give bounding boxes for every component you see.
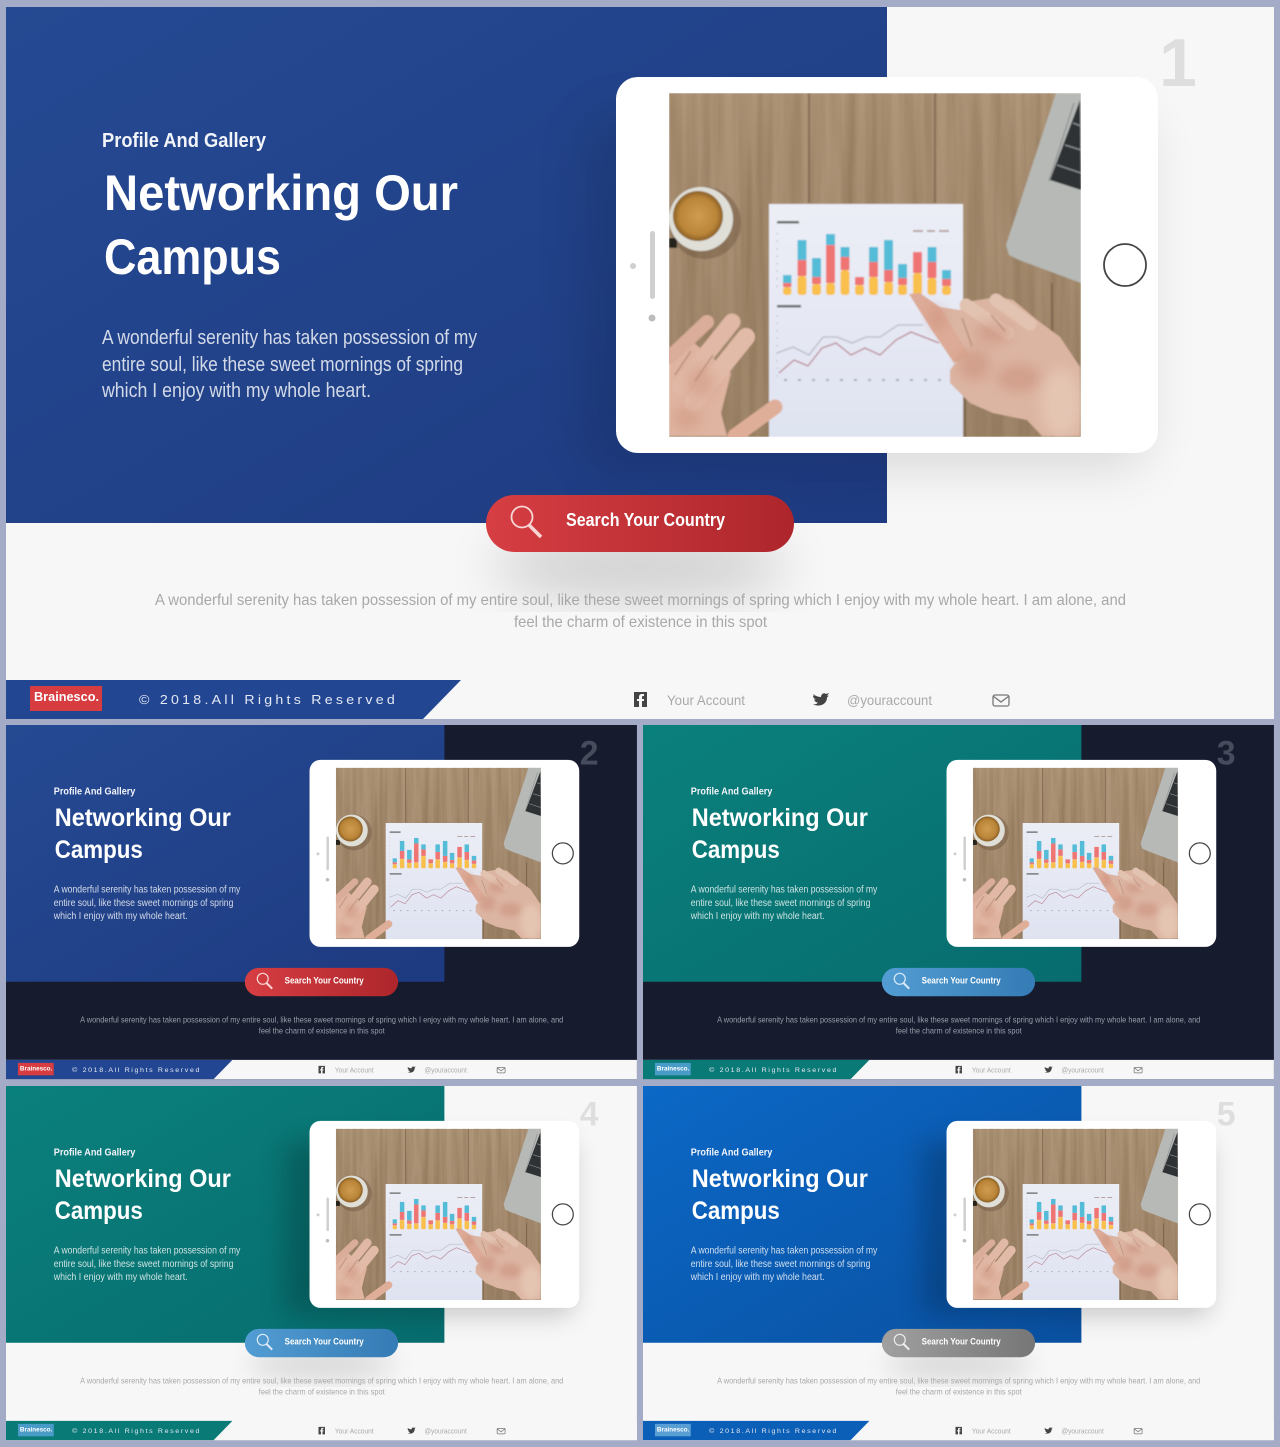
tablet mockup	[947, 760, 1216, 947]
icon: mail	[497, 1428, 505, 1434]
logo: Brainesco.	[657, 1065, 689, 1072]
panel: colour block	[6, 1086, 444, 1343]
caption: A wonderful serenity has taken possession of my entire soul, like these sweet mornings of spring which I enjoy with my whole heart. I am alone, and	[80, 1016, 563, 1025]
account label: Your Account	[972, 1428, 1011, 1435]
icon: facebook	[955, 1427, 962, 1434]
account label: Your Account	[667, 692, 745, 708]
panel: colour block	[643, 1086, 1081, 1343]
search button: Search Your Country	[285, 1336, 364, 1346]
description	[101, 327, 477, 402]
heading block: Profile And Gallery	[691, 787, 773, 798]
description: which I enjoy with my whole heart.	[101, 380, 371, 402]
tablet mockup	[616, 77, 1158, 453]
icon: twitter	[813, 693, 829, 706]
slide number: 3	[1217, 734, 1236, 772]
slide number: 1	[1159, 25, 1197, 101]
slide number: 4	[580, 1095, 599, 1133]
icon: mail	[1134, 1067, 1142, 1073]
copyright: © 2018.All Rights Reserved	[72, 1427, 201, 1435]
logo	[30, 686, 102, 711]
icon: mail	[993, 695, 1009, 706]
panel: colour block	[6, 725, 444, 982]
tablet mockup	[310, 1121, 579, 1308]
description: which I enjoy with my whole heart.	[690, 1272, 825, 1283]
heading block: Networking Our	[104, 165, 458, 221]
handle label: @youraccount	[847, 692, 932, 708]
description: entire soul, like these sweet mornings of spring	[102, 354, 463, 376]
description: A wonderful serenity has taken possession of my	[54, 885, 240, 896]
handle label: @youraccount	[1061, 1067, 1104, 1074]
footer	[643, 1421, 1274, 1440]
photo: desk with charts	[669, 93, 1081, 437]
caption: feel the charm of existence in this spot	[259, 1027, 385, 1036]
description: A wonderful serenity has taken possession of my	[102, 327, 477, 349]
slide number: 2	[580, 734, 599, 772]
heading block: Profile And Gallery	[54, 787, 136, 798]
heading block: Campus	[692, 836, 780, 864]
description	[53, 1246, 240, 1283]
copyright: © 2018.All Rights Reserved	[709, 1427, 838, 1435]
footer	[6, 680, 1010, 719]
footer	[6, 1421, 637, 1440]
description: A wonderful serenity has taken possession of my	[691, 885, 877, 896]
button shadow	[490, 539, 790, 595]
heading block: Profile And Gallery	[54, 1148, 136, 1159]
logo: Brainesco.	[34, 689, 99, 704]
button shadow	[884, 1351, 1033, 1379]
search button	[245, 1329, 398, 1357]
logo: Brainesco.	[20, 1065, 52, 1072]
search button	[882, 968, 1035, 996]
caption: A wonderful serenity has taken possession of my entire soul, like these sweet mornings of spring which I enjoy with my whole heart. I am alone, and	[717, 1016, 1200, 1025]
panel: colour block	[643, 725, 1081, 982]
description	[690, 1246, 877, 1283]
account label: Your Account	[335, 1428, 374, 1435]
heading block: Profile And Gallery	[691, 1148, 773, 1159]
search button	[882, 1329, 1035, 1357]
description: which I enjoy with my whole heart.	[53, 1272, 188, 1283]
heading block: Campus	[55, 1197, 143, 1225]
icon: twitter	[1045, 1427, 1053, 1434]
heading block: Campus	[104, 229, 281, 285]
photo: desk with charts	[973, 1129, 1178, 1300]
slide 1: large blue light	[6, 7, 1274, 719]
description: entire soul, like these sweet mornings of spring	[54, 1259, 233, 1270]
heading block: Networking Our	[692, 804, 868, 832]
tablet shadow	[922, 1141, 1210, 1315]
logo	[18, 1424, 54, 1436]
heading block	[691, 787, 868, 864]
tablet shadow	[285, 1141, 573, 1315]
description: entire soul, like these sweet mornings of spring	[54, 898, 233, 909]
handle label: @youraccount	[1061, 1428, 1104, 1435]
caption: A wonderful serenity has taken possession of my entire soul, like these sweet mornings of spring which I enjoy with my whole heart. I am alone, and	[80, 1377, 563, 1386]
tablet shadow	[586, 117, 1146, 467]
icon: mail	[497, 1067, 505, 1073]
caption: A wonderful serenity has taken possession of my entire soul, like these sweet mornings of spring which I enjoy with my whole heart. I am alone, and	[717, 1377, 1200, 1386]
icon: facebook	[318, 1427, 325, 1434]
photo: desk with charts	[973, 768, 1178, 939]
account label: Your Account	[335, 1067, 374, 1074]
tablet mockup	[310, 760, 579, 947]
heading block: Profile And Gallery	[102, 130, 267, 152]
account label: Your Account	[972, 1067, 1011, 1074]
icon: facebook	[955, 1066, 962, 1073]
icon: twitter	[1045, 1066, 1053, 1073]
heading block: Networking Our	[692, 1165, 868, 1193]
caption	[717, 1377, 1200, 1397]
description	[53, 885, 240, 922]
description: entire soul, like these sweet mornings of spring	[691, 898, 870, 909]
slide 4: teal light	[6, 1086, 637, 1440]
icon: facebook	[634, 692, 647, 707]
heading block: Networking Our	[55, 804, 231, 832]
caption: feel the charm of existence in this spot	[896, 1388, 1022, 1397]
heading block: Networking Our	[55, 1165, 231, 1193]
search button	[245, 968, 398, 996]
description	[690, 885, 877, 922]
photo: desk with charts	[336, 768, 541, 939]
caption	[80, 1016, 563, 1036]
logo: Brainesco.	[20, 1426, 52, 1433]
caption: A wonderful serenity has taken possession of my entire soul, like these sweet mornings of spring which I enjoy with my whole heart. I am alone, and	[155, 592, 1126, 609]
tablet mockup	[947, 1121, 1216, 1308]
slide 2: blue dark	[6, 725, 637, 1079]
logo	[655, 1063, 691, 1075]
caption	[155, 592, 1126, 631]
icon: facebook	[318, 1066, 325, 1073]
panel: colour block	[6, 7, 887, 523]
heading block	[691, 1148, 868, 1225]
description: entire soul, like these sweet mornings of spring	[691, 1259, 870, 1270]
description: A wonderful serenity has taken possession of my	[691, 1246, 877, 1257]
logo	[18, 1063, 54, 1075]
copyright: © 2018.All Rights Reserved	[139, 692, 398, 707]
slide number: 5	[1217, 1095, 1236, 1133]
heading block: Campus	[55, 836, 143, 864]
caption	[717, 1016, 1200, 1036]
logo: Brainesco.	[657, 1426, 689, 1433]
heading block: Campus	[692, 1197, 780, 1225]
heading block	[54, 1148, 231, 1225]
search button	[486, 495, 794, 552]
description: which I enjoy with my whole heart.	[53, 911, 188, 922]
handle label: @youraccount	[424, 1067, 467, 1074]
icon: mail	[1134, 1428, 1142, 1434]
icon: twitter	[408, 1066, 416, 1073]
caption: feel the charm of existence in this spot	[896, 1027, 1022, 1036]
search button: Search Your Country	[285, 975, 364, 985]
caption	[80, 1377, 563, 1397]
footer	[643, 1060, 1274, 1079]
search button: Search Your Country	[566, 510, 725, 530]
logo	[655, 1424, 691, 1436]
footer	[6, 1060, 637, 1079]
photo: desk with charts	[336, 1129, 541, 1300]
search button: Search Your Country	[922, 1336, 1001, 1346]
button shadow	[247, 1351, 396, 1379]
copyright: © 2018.All Rights Reserved	[72, 1066, 201, 1074]
slide 5: bright blue light	[643, 1086, 1274, 1440]
caption: feel the charm of existence in this spot	[514, 614, 768, 631]
handle label: @youraccount	[424, 1428, 467, 1435]
copyright: © 2018.All Rights Reserved	[709, 1066, 838, 1074]
description: which I enjoy with my whole heart.	[690, 911, 825, 922]
caption: feel the charm of existence in this spot	[259, 1388, 385, 1397]
heading block	[102, 130, 458, 285]
icon: twitter	[408, 1427, 416, 1434]
slide 3: teal dark	[643, 725, 1274, 1079]
heading block	[54, 787, 231, 864]
search button: Search Your Country	[922, 975, 1001, 985]
description: A wonderful serenity has taken possession of my	[54, 1246, 240, 1257]
